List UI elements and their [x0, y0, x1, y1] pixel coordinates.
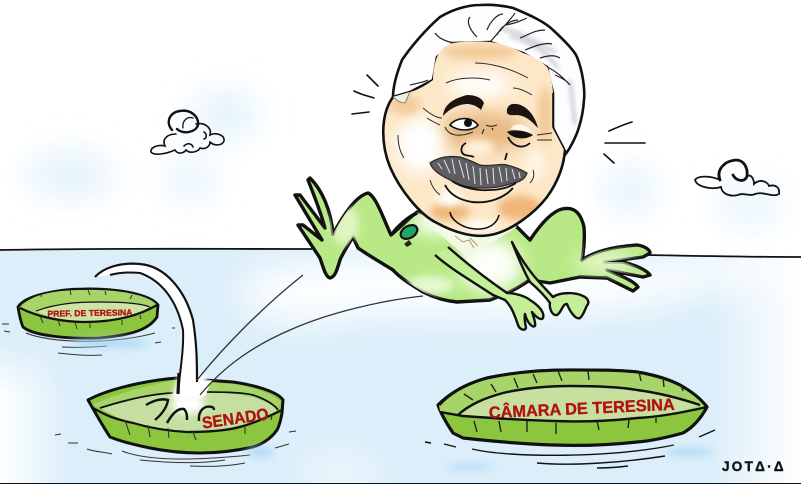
neck shadow [423, 205, 517, 258]
pad label: SENADO [201, 405, 270, 433]
pad label: PREF. DE TERESINA [47, 307, 133, 319]
pad rim [439, 370, 706, 421]
mouth [445, 181, 516, 202]
hair [393, 5, 584, 157]
jump trail lines [197, 275, 423, 395]
pad inner [20, 290, 157, 322]
frog collar badge [398, 222, 420, 242]
splash droplets [146, 399, 214, 423]
horizon line [0, 249, 801, 257]
ear mark [393, 92, 410, 103]
face outline [383, 97, 565, 236]
nose [461, 125, 507, 160]
ripples [2, 324, 175, 355]
pad: Senado [55, 264, 296, 466]
pad: Pref. de Teresina [2, 289, 175, 355]
frog front arm left [435, 247, 543, 330]
motion marks right [604, 122, 645, 163]
right eye [507, 124, 533, 147]
moustache [430, 157, 527, 188]
pad inner surface [100, 392, 278, 432]
signature: JOTΔ·Δ [722, 459, 785, 474]
motion marks left [352, 75, 378, 114]
frog light shading [331, 205, 635, 294]
pad hull [438, 370, 707, 445]
sky watercolor smudges [28, 95, 780, 219]
cloud: left [151, 111, 224, 154]
splash column [95, 264, 212, 396]
head [383, 5, 584, 258]
hair strands [410, 13, 570, 85]
pad inner [458, 386, 700, 421]
moustache highlights [438, 159, 520, 185]
water highlights [70, 338, 714, 470]
frog front arm right [512, 242, 588, 318]
wrinkles [398, 63, 552, 195]
pad hull [18, 289, 158, 338]
bottom border [0, 483, 801, 484]
ripples [55, 431, 296, 466]
splash foam [171, 394, 205, 414]
cloud: right [695, 160, 779, 196]
pad: Camara de Teresina [425, 370, 715, 468]
frog body [295, 178, 650, 330]
pad label: CÂMARA DE TERESINA [488, 395, 675, 422]
face watercolor [389, 45, 552, 231]
pad hull [88, 378, 283, 453]
water surface [0, 249, 801, 484]
ripples [425, 430, 715, 468]
eyebrows [443, 95, 538, 128]
hair shading [500, 28, 575, 125]
frog collar button [404, 240, 412, 247]
chin [450, 212, 499, 229]
face [383, 41, 565, 236]
left eye [445, 119, 478, 135]
